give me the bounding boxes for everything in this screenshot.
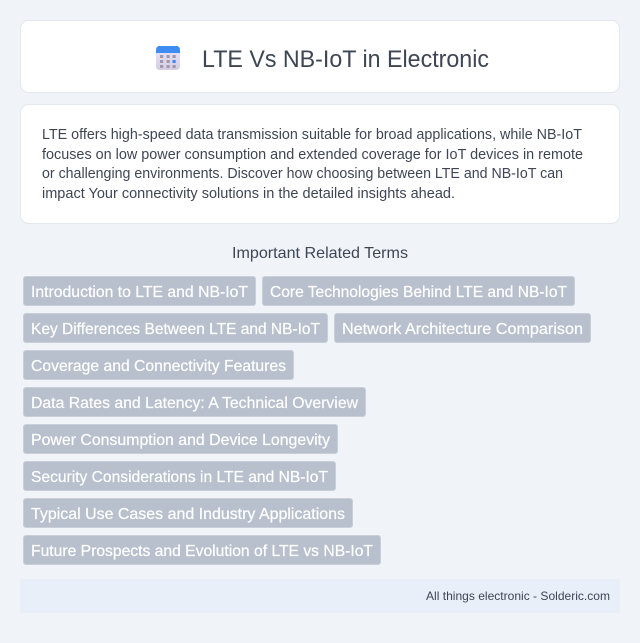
footer: All things electronic - Solderic.com <box>426 589 610 603</box>
tag: Security Considerations in LTE and NB-IoT <box>31 469 328 486</box>
tag <box>334 314 590 342</box>
text block: description: LTE offers high-speed data transmission suitable for broad applications, while NB-IoT <box>42 127 582 143</box>
text block: description: or challenging environments. Discover how choosing between LTE and NB-IoT can <box>42 166 563 182</box>
tag list <box>24 276 590 564</box>
tag <box>262 276 574 306</box>
tag <box>24 462 336 490</box>
tag: Data Rates and Latency: A Technical Overview <box>31 395 358 412</box>
panel: header <box>20 20 620 92</box>
title: LTE Vs NB-IoT in Electronic <box>202 46 489 73</box>
text block: description: impact Your connectivity solutions in the detailed insights ahead. <box>42 186 455 202</box>
tag: Future Prospects and Evolution of LTE vs NB-IoT <box>31 543 373 560</box>
text block: description <box>42 127 583 202</box>
tag: Core Technologies Behind LTE and NB-IoT <box>270 284 567 301</box>
panel: introduction <box>20 104 620 224</box>
tag: Power Consumption and Device Longevity <box>31 432 330 449</box>
tag: Typical Use Cases and Industry Applications <box>31 506 345 523</box>
tag <box>24 498 352 528</box>
heading: related terms: Important Related Terms <box>232 245 408 262</box>
tag: Network Architecture Comparison <box>342 321 583 338</box>
tag: Coverage and Connectivity Features <box>31 358 286 375</box>
tag: Introduction to LTE and NB-IoT <box>31 284 248 301</box>
text block: description: focuses on low power consumption and extended coverage for IoT devices in remote <box>42 147 583 163</box>
tag <box>24 388 366 416</box>
tag <box>24 276 256 306</box>
tag <box>24 424 338 454</box>
tag <box>24 314 328 342</box>
tag: Key Differences Between LTE and NB-IoT <box>31 321 320 338</box>
tag <box>24 536 380 564</box>
tag <box>24 350 294 380</box>
icon: calendar grid <box>156 46 180 70</box>
footer <box>20 579 620 613</box>
